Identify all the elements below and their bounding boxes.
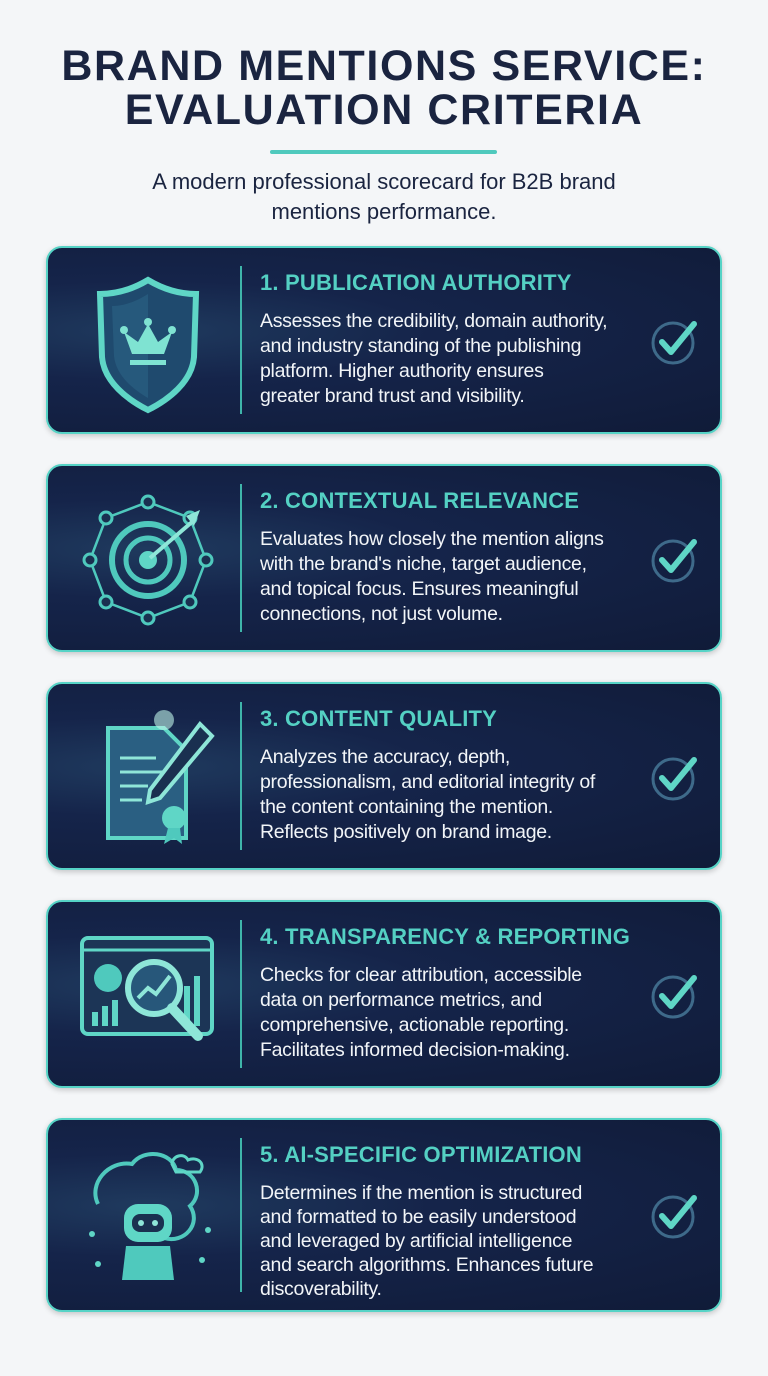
text: and search algorithms. Enhances future: [260, 1254, 593, 1276]
text: discoverability.: [260, 1278, 382, 1300]
text: and formatted to be easily understood: [260, 1206, 576, 1228]
text: Facilitates informed decision-making.: [260, 1039, 570, 1061]
heading: 4. TRANSPARENCY & REPORTING: [260, 924, 630, 949]
icon: document pen: [106, 710, 215, 844]
text: Evaluates how closely the mention aligns: [260, 528, 604, 550]
icon: AI brain robot: [89, 1152, 211, 1280]
text: comprehensive, actionable reporting.: [260, 1014, 569, 1036]
text: [260, 1182, 593, 1300]
icon: target network: [82, 494, 214, 626]
text: Reflects positively on brand image.: [260, 821, 552, 843]
text: Checks for clear attribution, accessible: [260, 964, 582, 986]
text: [260, 746, 596, 843]
icon: check: [652, 757, 697, 800]
text: data on performance metrics, and: [260, 989, 542, 1011]
title: EVALUATION CRITERIA: [125, 86, 643, 134]
heading: 3. CONTENT QUALITY: [260, 706, 497, 731]
panel: content quality: [46, 682, 722, 870]
text: greater brand trust and visibility.: [260, 385, 524, 407]
text: [260, 964, 582, 1061]
text: and topical focus. Ensures meaningful: [260, 578, 578, 600]
subtitle: [152, 169, 616, 224]
icon: shield crown: [96, 276, 200, 414]
text: Determines if the mention is structured: [260, 1182, 582, 1204]
text: Assesses the credibility, domain authority,: [260, 310, 607, 332]
title: [61, 42, 707, 134]
heading: 5. AI-SPECIFIC OPTIMIZATION: [260, 1142, 582, 1167]
text: [260, 528, 604, 625]
panel: publication authority: [46, 246, 722, 434]
text: Analyzes the accuracy, depth,: [260, 746, 510, 768]
icon: check: [652, 539, 697, 582]
panel: transparency reporting: [46, 900, 722, 1088]
text: [260, 310, 607, 407]
subtitle: A modern professional scorecard for B2B brand: [152, 169, 616, 194]
text: and industry standing of the publishing: [260, 335, 581, 357]
icon: check: [652, 975, 697, 1018]
text: the content containing the mention.: [260, 796, 553, 818]
text: platform. Higher authority ensures: [260, 360, 544, 382]
panel: AI optimization: [46, 1118, 722, 1312]
text: with the brand's niche, target audience,: [260, 553, 587, 575]
icon: check: [652, 1195, 697, 1238]
text: connections, not just volume.: [260, 603, 503, 625]
heading: 1. PUBLICATION AUTHORITY: [260, 270, 572, 295]
text: and leveraged by artificial intelligence: [260, 1230, 572, 1252]
icon: dashboard magnifier: [80, 936, 214, 1041]
subtitle: mentions performance.: [272, 199, 496, 224]
icon: check: [652, 321, 697, 364]
title: BRAND MENTIONS SERVICE:: [61, 42, 707, 90]
text: professionalism, and editorial integrity of: [260, 771, 595, 793]
panel: contextual relevance: [46, 464, 722, 652]
heading: 2. CONTEXTUAL RELEVANCE: [260, 488, 579, 513]
